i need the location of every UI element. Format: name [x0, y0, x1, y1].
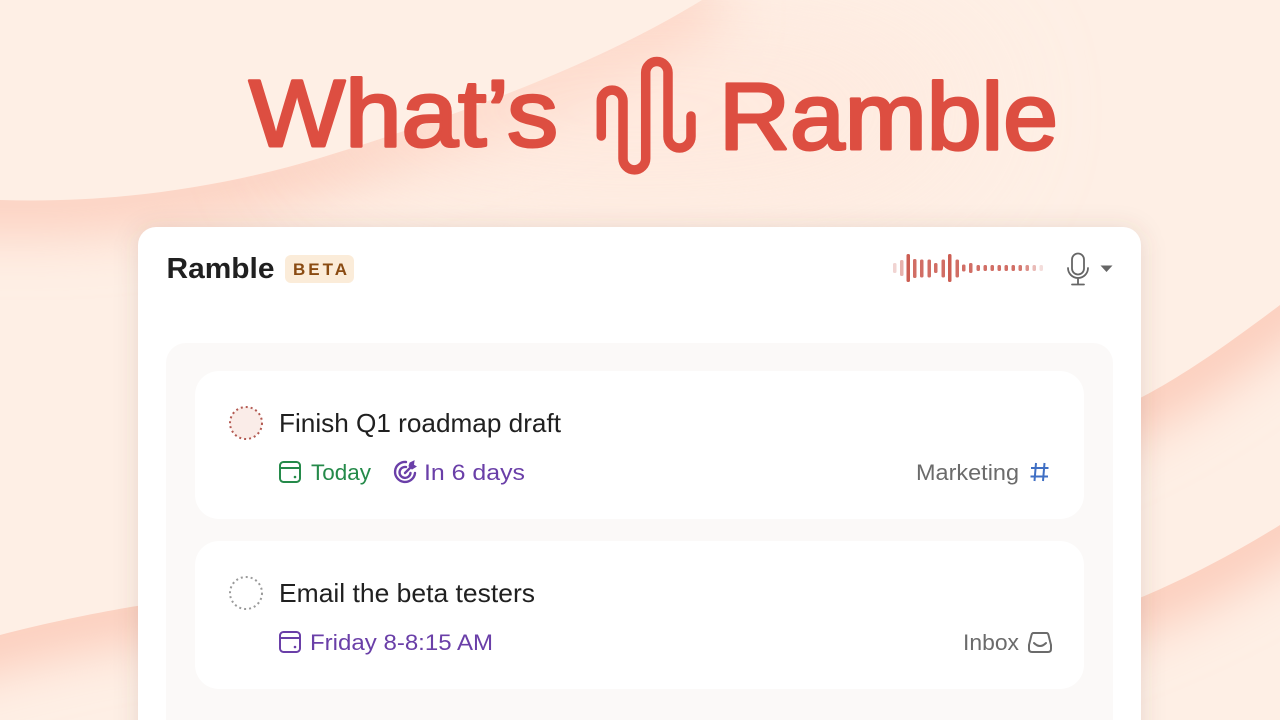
icon: today calendar — [280, 462, 300, 482]
title word: Ramble: Ramble — [719, 64, 1058, 170]
project: Inbox: Inbox — [963, 630, 1020, 655]
icon: audio waveform — [893, 254, 1043, 282]
icon: task circle — [230, 577, 262, 609]
badge: BETA — [285, 255, 354, 283]
icon: deadline target — [395, 461, 416, 482]
icon: project hash — [1030, 463, 1048, 481]
task card: Email the beta testers — [195, 541, 1084, 689]
icon: dropdown caret — [1100, 266, 1112, 272]
badge: BETA: BETA — [293, 260, 347, 279]
deadline: In 6 days: In 6 days — [424, 460, 525, 485]
due date: Friday 8-8:15 AM: Friday 8-8:15 AM — [310, 630, 493, 655]
project: Marketing: Marketing — [916, 460, 1019, 485]
card shadow — [138, 229, 1141, 720]
icon: inbox tray — [1029, 633, 1051, 652]
task title: Finish Q1 roadmap draft — [279, 408, 562, 438]
icon: microphone — [1068, 254, 1088, 284]
icon: Ramble squiggle logo — [601, 62, 691, 170]
due date: Today: Today — [311, 460, 372, 485]
icon: scheduled calendar — [280, 632, 300, 652]
task card: Finish Q1 roadmap draft — [195, 371, 1084, 519]
panel: Ramble app card — [138, 227, 1141, 720]
task title: Email the beta testers — [279, 578, 535, 608]
panel: task list — [166, 343, 1113, 720]
title word: What's: What’s — [249, 61, 558, 167]
title: What's Ramble — [249, 61, 1058, 170]
header: Ramble heading: Ramble — [166, 253, 274, 285]
icon: priority circle — [230, 407, 262, 439]
